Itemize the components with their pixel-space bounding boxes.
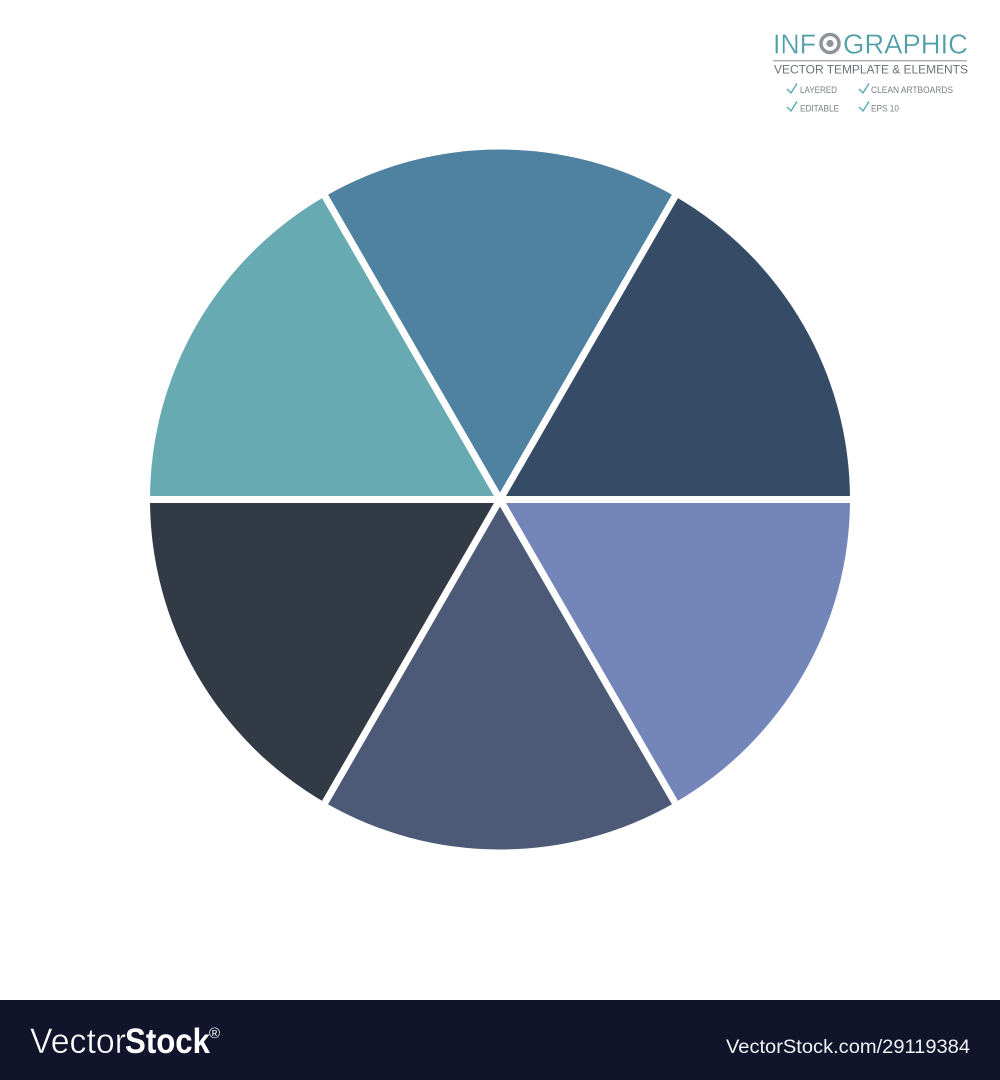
- segment: slate bottom: [325, 500, 675, 849]
- footer image id: VectorStock.com/29119384: [726, 1037, 970, 1058]
- footer brand wordmark: Stock: [125, 1022, 210, 1061]
- feature: layered: LAYERED: [800, 85, 837, 95]
- segment: periwinkle lower right: [500, 500, 850, 803]
- footer brand wordmark: ®: [209, 1025, 220, 1042]
- feature: clean artboards: CLEAN ARTBOARDS: [871, 85, 953, 95]
- footer brand wordmark: [30, 1022, 220, 1061]
- logo subtitle: VECTOR TEMPLATE & ELEMENTS: [774, 62, 968, 76]
- pie chart: six equal segments: [145, 150, 855, 849]
- segment: navy upper right: [500, 196, 850, 500]
- feature: editable: EDITABLE: [800, 104, 839, 114]
- segment: charcoal lower left: [150, 500, 500, 803]
- segment: steel blue top: [325, 150, 675, 500]
- footer bar: [0, 1000, 1000, 1080]
- feature: editable: [787, 102, 839, 114]
- icon: target letter O: [821, 34, 839, 52]
- footer brand wordmark: Vector: [30, 1022, 126, 1061]
- logo block: infographic template badge: [773, 28, 968, 114]
- logo title: INF: [773, 28, 816, 60]
- logo title: GRAPHIC: [843, 28, 968, 60]
- segment: teal upper left: [150, 196, 500, 500]
- feature: eps 10: EPS 10: [871, 104, 899, 114]
- feature: layered: [787, 84, 837, 95]
- feature: eps 10: [859, 102, 899, 114]
- logo title: [773, 28, 968, 60]
